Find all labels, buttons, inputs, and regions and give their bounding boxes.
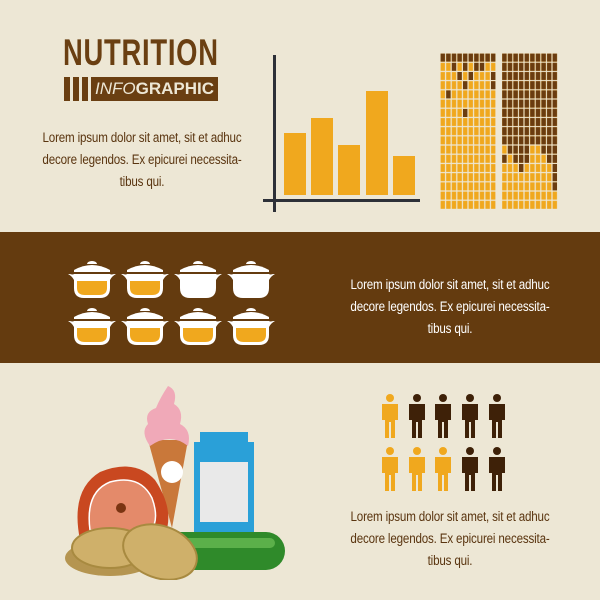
cookies — [65, 540, 155, 576]
subheading bar: INFOGRAPHIC — [64, 77, 218, 101]
food illustration — [65, 386, 285, 580]
text block bottom: Lorem ipsum dolor sit amet, sit et adhuc decore legendos. Ex epicurei necessita-tibus qui. — [350, 509, 550, 568]
text block band: Lorem ipsum dolor sit amet, sit et adhuc decore legendos. Ex epicurei necessita-tibus qui. — [350, 277, 550, 336]
bar chart — [263, 55, 420, 212]
people icons — [382, 394, 505, 491]
cucumber — [160, 532, 285, 570]
pots icons — [68, 261, 275, 345]
milk carton — [200, 432, 248, 442]
ham — [78, 467, 168, 540]
waffle grids — [440, 54, 558, 209]
panel: brown band — [0, 232, 600, 363]
ice cream — [148, 440, 188, 528]
title — [63, 32, 219, 101]
text block top: Lorem ipsum dolor sit amet, sit et adhuc decore legendos. Ex epicurei necessita-tibus qui. — [42, 130, 242, 189]
heading: NUTRITION: NUTRITION — [63, 32, 219, 73]
subheading bar: INFOGRAPHIC: INFOGRAPHIC — [95, 79, 214, 98]
